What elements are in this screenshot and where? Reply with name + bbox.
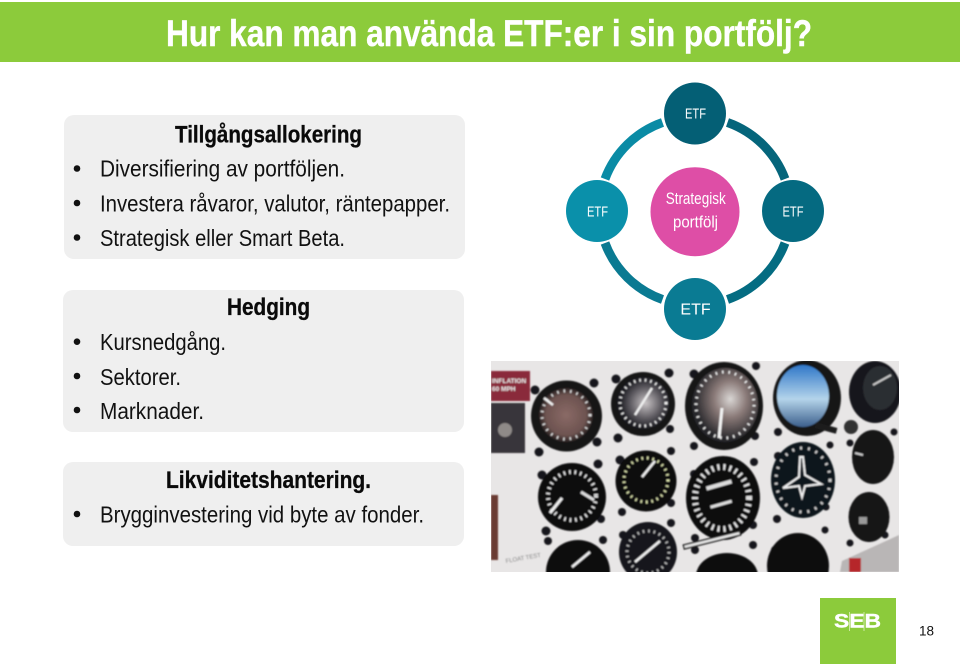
node: ETF right	[762, 180, 824, 242]
rivets	[530, 362, 898, 554]
title banner: Hur kan man använda ETF:er i sin portfölj?	[166, 13, 812, 54]
airplane symbol	[783, 457, 821, 497]
SEB logo: SEB	[834, 612, 881, 632]
gauge row 2	[538, 430, 894, 542]
node: ETF top: ETF	[685, 106, 706, 122]
centre node: Strategisk portfölj: portfölj	[673, 212, 718, 232]
diagram: strategisk portfölj cycle	[566, 82, 824, 340]
heading: Tillgångsallokering: Tillgångsallokering	[175, 122, 362, 148]
bullet list: Hedging: Marknader.	[100, 398, 204, 424]
node: ETF right: ETF	[782, 204, 804, 220]
panel: Hedging	[63, 290, 464, 432]
placard: INFLATION	[492, 378, 526, 385]
bullet list: Hedging: Kursnedgång.	[100, 329, 226, 355]
bullet list: Tillgångsallokering: Diversifiering av portföljen.	[100, 156, 345, 182]
placard: 60 MPH	[492, 386, 516, 393]
bullet list: Hedging	[74, 329, 226, 424]
bullet list: Tillgångsallokering: Strategisk eller Smart Beta.	[100, 225, 345, 251]
node: ETF left: ETF	[587, 204, 608, 220]
centre node: Strategisk portfölj: Strategisk	[666, 189, 726, 208]
SEB logo	[820, 598, 896, 664]
panel: Likviditetshantering	[63, 462, 464, 546]
placard	[491, 371, 542, 565]
node: ETF top	[664, 82, 726, 144]
panel: Tillgångsallokering	[64, 115, 465, 259]
title banner	[0, 2, 960, 62]
heading: Likviditetshantering: Likviditetshantering.	[166, 467, 371, 494]
gauge row 3	[545, 521, 899, 572]
bullet list: Hedging: Sektorer.	[100, 364, 181, 390]
page number: 18	[919, 624, 934, 638]
bullet list: Likviditetshantering: Brygginvestering vid byte av fonder.	[100, 502, 424, 528]
bullet list: Tillgångsallokering	[74, 156, 450, 251]
heading: Hedging: Hedging	[227, 294, 310, 321]
ring arcs	[605, 122, 785, 300]
bullet list: Tillgångsallokering: Investera råvaror, valutor, räntepapper.	[100, 190, 450, 216]
centre node: Strategisk portfölj	[650, 167, 740, 256]
gauge row 1	[531, 360, 901, 452]
placard: FLOAT TEST	[505, 553, 542, 565]
node: ETF left	[566, 180, 628, 242]
node: ETF bottom	[664, 278, 726, 340]
node: ETF bottom: ETF	[680, 302, 711, 318]
photo: cockpit instrument panel	[491, 361, 899, 572]
